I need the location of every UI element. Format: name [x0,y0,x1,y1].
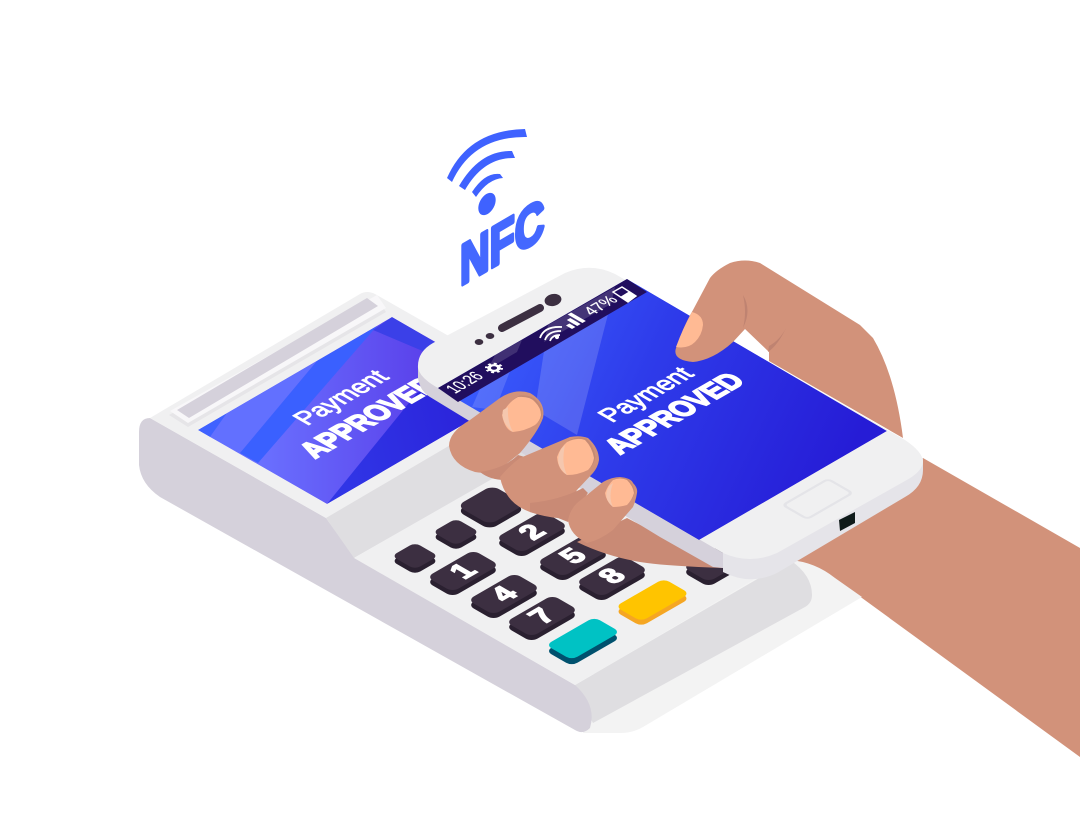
key 4 [468,573,540,620]
phone left edge [418,365,723,568]
key 8: 8 [592,564,633,588]
phone bottom edge [723,458,923,579]
phone screen text: Payment: Payment [591,363,701,426]
terminal screen [198,317,480,504]
key 7 [506,595,578,642]
middle nail [557,437,596,475]
knuckle creases [743,295,786,352]
hand: palm under phone [577,518,723,568]
terminal sloped band [326,350,640,558]
thumb nail [676,312,703,347]
status: clock: 10:26 [441,369,488,396]
ring nail [605,478,635,507]
key 8 [576,555,648,602]
terminal screen text: Payment: Payment [286,366,396,429]
key: large top [457,485,525,530]
key 2 [496,511,568,558]
phone front face [418,268,923,559]
key 1: 1 [443,559,484,583]
middle finger shade [530,488,588,522]
illustration: NFC phone payment on terminal [139,129,1080,757]
key 7: 7 [522,604,563,628]
key: far right [683,540,755,587]
smartphone [418,268,923,579]
status bar [438,279,647,402]
key: green [546,617,620,666]
arm [700,458,1080,757]
status: battery icon [613,287,636,302]
terminal screen text: APPROVED: APPROVED [291,372,447,463]
key: small left [392,542,438,574]
terminal top surface [150,292,640,518]
hand: ring finger [568,477,637,543]
phone earpiece [502,308,540,328]
key: small top [433,518,479,550]
printer slot [169,295,386,427]
phone home button [783,479,852,519]
terminal front face [139,418,592,732]
keypad keys [392,485,755,666]
status: settings gear [483,362,505,374]
status: wifi [540,327,562,341]
key: yellow [615,578,690,626]
status: battery percent: 47% [579,293,622,318]
NFC label: NFC [460,187,544,299]
icon: NFC wireless waves [447,129,527,218]
index finger shade [480,455,528,480]
phone screen [438,279,887,540]
terminal right face [575,560,812,723]
key 4: 4 [484,582,525,606]
phone front camera [543,292,563,308]
phone sensors [475,333,494,345]
hand: middle finger [500,436,599,522]
index nail [502,395,542,432]
key 2: 2 [512,520,553,544]
key 5: 5 [553,544,594,568]
key 1 [427,550,499,597]
keypad surface [354,440,775,685]
terminal shadow [583,560,862,733]
status: signal bars [557,312,586,329]
phone charging port [839,512,855,531]
hand: thumb and palm [675,260,903,438]
phone screen text: APPROVED: APPROVED [596,368,752,459]
hand: index finger [449,391,543,480]
payment terminal [139,292,812,732]
key 5 [537,535,609,582]
